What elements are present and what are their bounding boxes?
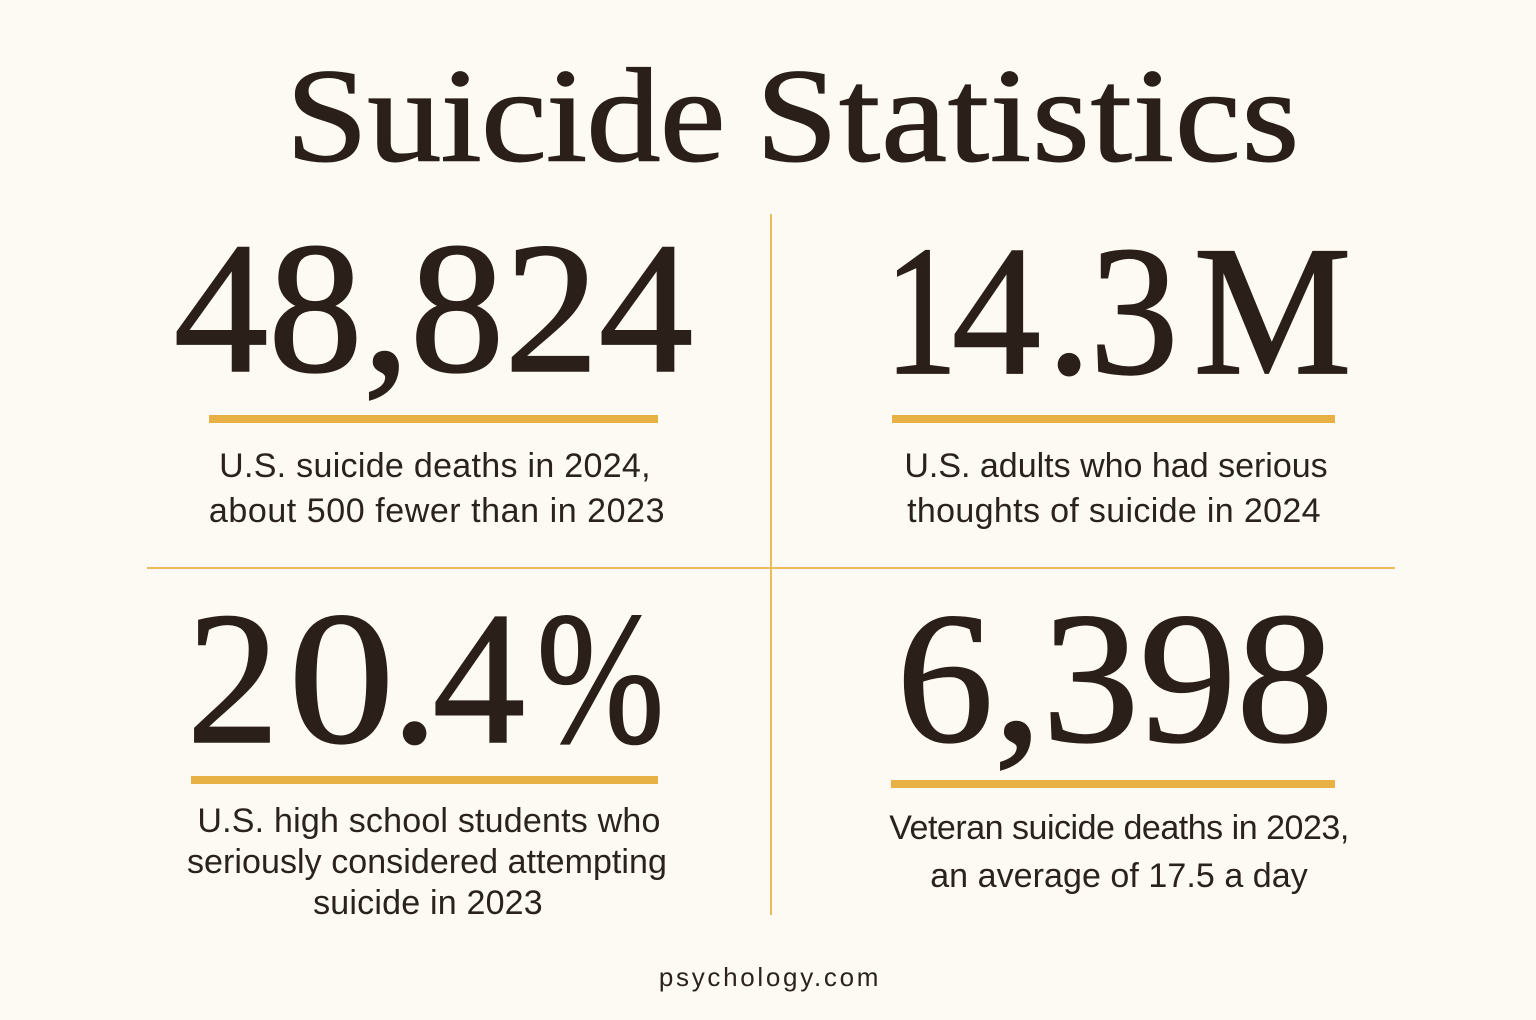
caption: U.S. suicide deaths in 2024, — [219, 447, 651, 485]
caption: seriously considered attempting — [187, 843, 667, 881]
caption: Veteran suicide deaths in 2023, — [889, 809, 1349, 847]
caption: about 500 fewer than in 2023 — [209, 492, 665, 530]
panel: U.S. adults — [884, 208, 1352, 530]
caption: thoughts of suicide in 2024 — [907, 492, 1321, 530]
footer source: psychology.com — [659, 962, 881, 992]
accent bar — [191, 776, 658, 784]
stat number: 6,398 — [896, 574, 1334, 781]
panel: U.S. suicide deaths — [174, 204, 693, 530]
vertical divider — [770, 214, 772, 915]
caption: U.S. high school students who — [197, 802, 661, 840]
caption — [904, 447, 1328, 530]
title: Suicide Statistics — [286, 42, 1300, 190]
accent bar — [891, 780, 1335, 788]
caption: an average of 17.5 a day — [930, 857, 1308, 895]
caption — [187, 802, 667, 922]
stat number: 4.3M — [952, 208, 1352, 413]
stat number: 1 — [884, 208, 957, 413]
horizontal divider — [147, 567, 1395, 569]
panel: veterans — [889, 574, 1349, 895]
caption — [209, 447, 665, 530]
stat number: 0 — [288, 573, 394, 783]
stat number: 2 .4 — [187, 573, 523, 783]
stat number: % — [536, 573, 664, 783]
accent bar — [209, 415, 658, 423]
accent bar — [892, 415, 1335, 423]
caption: suicide in 2023 — [313, 884, 543, 922]
stat number: 48,824 — [174, 204, 693, 411]
caption: U.S. adults who had serious — [904, 447, 1328, 485]
caption — [889, 809, 1349, 895]
panel: high school students — [187, 573, 667, 922]
